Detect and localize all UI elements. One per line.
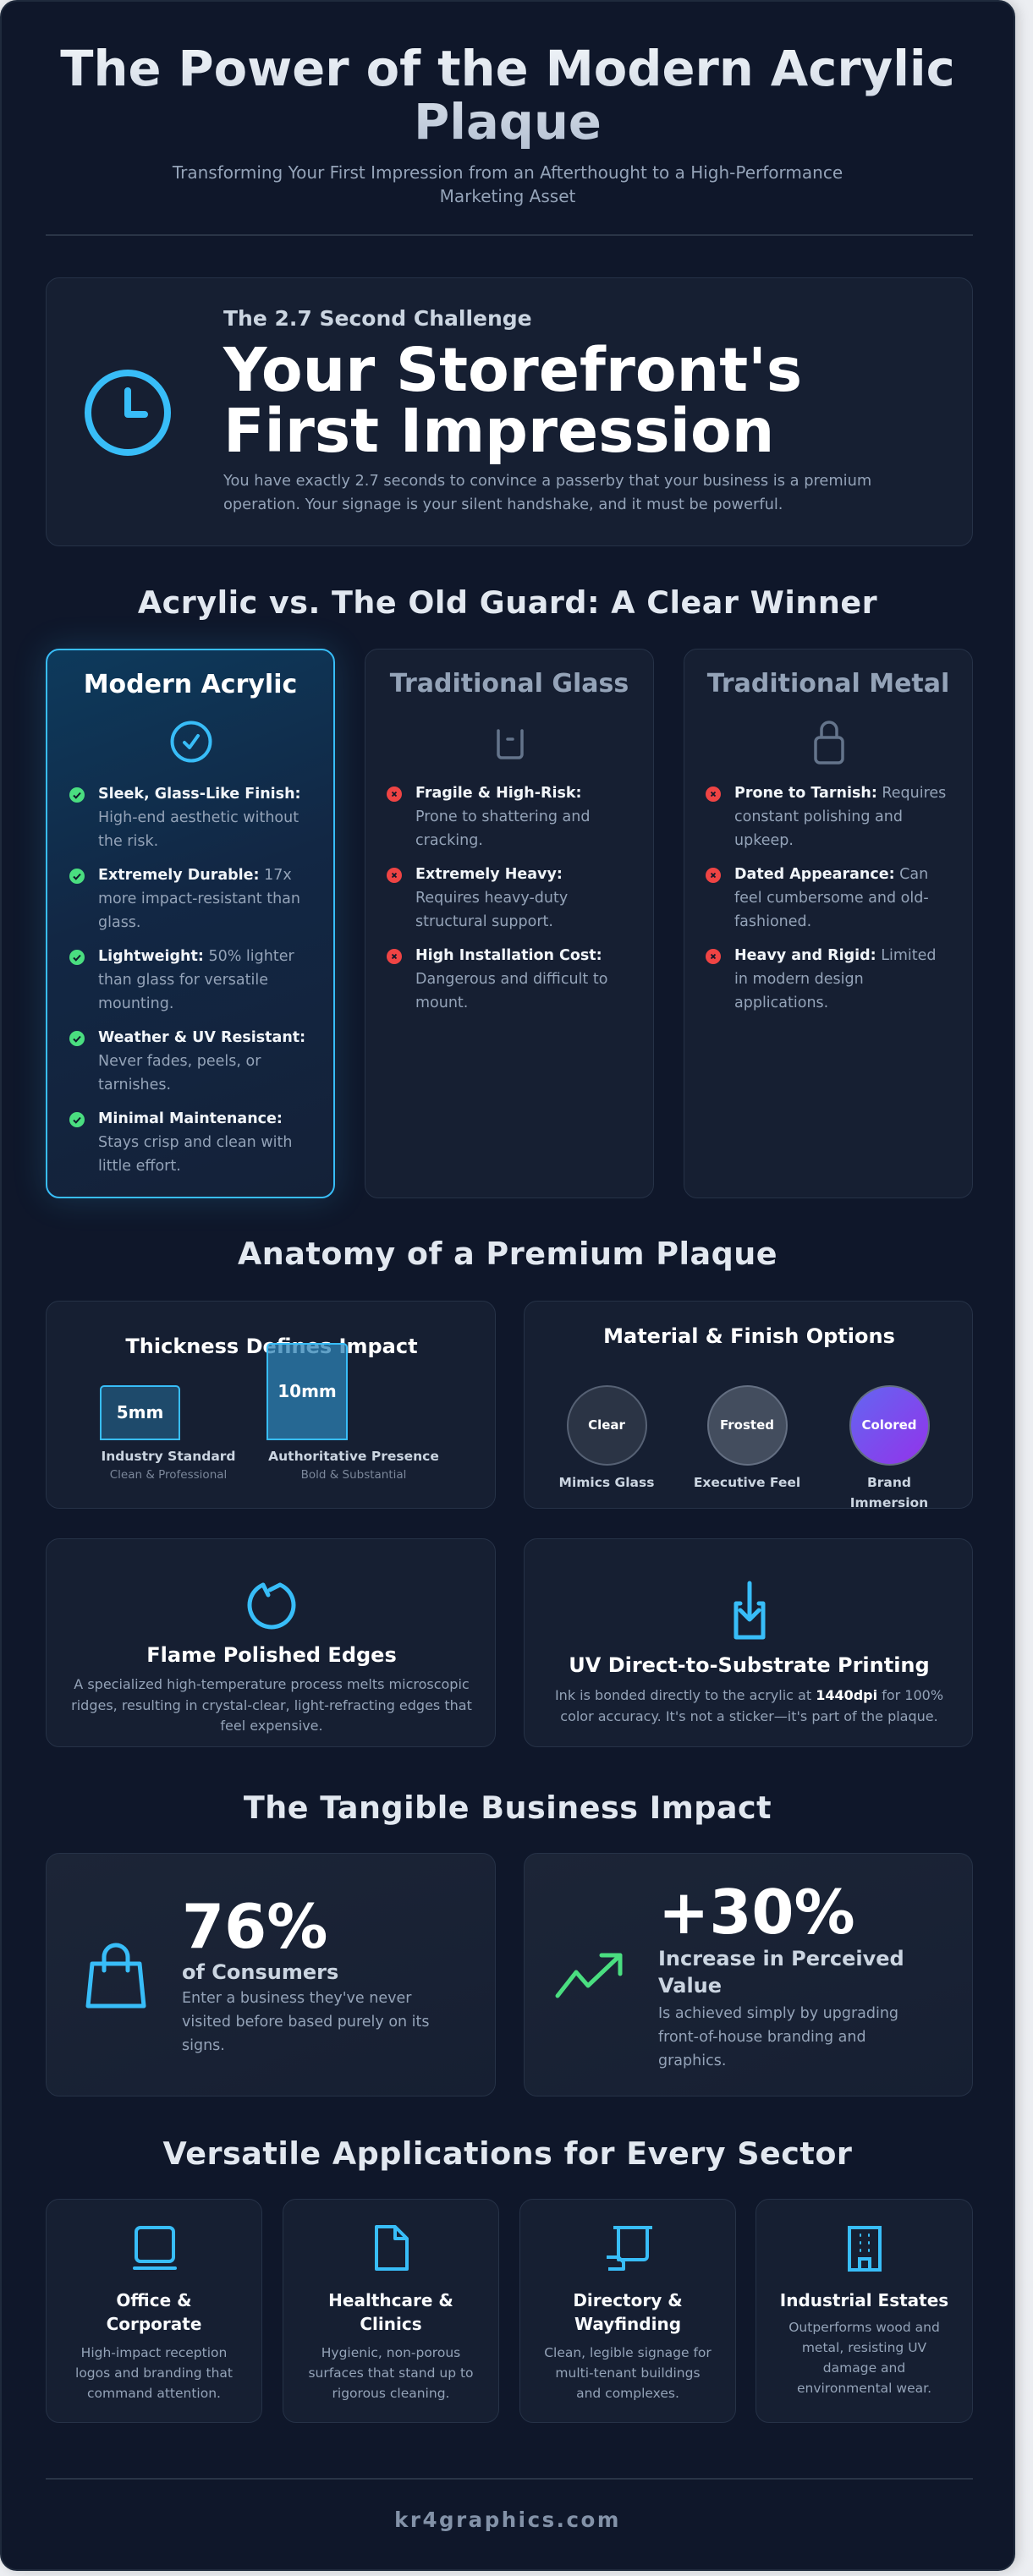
list: pros: tarnishes. [98, 1077, 171, 1093]
title: The Power of the Modern Acrylic [60, 41, 955, 97]
stat text: Increase in Perceived [658, 1947, 904, 1970]
list: metal cons: fashioned. [734, 913, 811, 930]
hero text: operation. Your signage is your silent handshake, and it must be powerful. [223, 496, 783, 513]
panel: traditional glass [365, 649, 654, 1198]
list: glass cons: Requires heavy-duty [415, 890, 568, 907]
list: metal cons: applications. [734, 995, 828, 1011]
hero text: You have exactly 2.7 seconds to convince a passerby that your business is a premium [223, 472, 871, 490]
list: pros: Never fades, peels, or [98, 1053, 261, 1070]
panel: hero first impression [46, 277, 973, 546]
list: glass cons: cracking. [415, 832, 483, 849]
list: pros [69, 786, 305, 1175]
card title: Modern Acrylic [84, 670, 297, 699]
stat text: Value [658, 1974, 722, 1998]
uv description: color accuracy. It's not a sticker—it's part of the plaque. [560, 1708, 938, 1724]
stat text: +30% [658, 1877, 855, 1948]
hero text: The 2.7 Second Challenge [223, 306, 532, 331]
directory description: and complexes. [576, 2386, 679, 2401]
healthcare title: Healthcare & [328, 2290, 453, 2310]
list: glass cons: mount. [415, 995, 468, 1011]
bar: 5mm: 5mm [117, 1402, 163, 1422]
office description: logos and branding that [75, 2365, 233, 2381]
list: pros: Sleek, Glass-Like Finish: [98, 786, 301, 803]
list: pros: than glass for versatile [98, 972, 268, 989]
icon: uv print [734, 1581, 765, 1639]
office title [107, 2290, 201, 2334]
flame description: A specialized high-temperature process melts microscopic [74, 1676, 470, 1692]
heading: comparison: Acrylic vs. The Old Guard: A Clear Winner [138, 584, 877, 621]
panel: industrial [756, 2199, 973, 2423]
list: metal cons [706, 785, 946, 1011]
flame description: ridges, resulting in crystal-clear, light-refracting edges that [71, 1696, 472, 1713]
list: metal cons: constant polishing and [734, 808, 903, 825]
uv description [555, 1687, 943, 1724]
list: metal cons: Dated Appearance: Can [734, 866, 928, 883]
title: Plaque [414, 94, 602, 151]
heading: business impact: The Tangible Business Impact [244, 1789, 772, 1826]
uv title: UV Direct-to-Substrate Printing [569, 1653, 930, 1677]
bar: 5mm [100, 1385, 180, 1440]
list: pros: Lightweight: 50% lighter [98, 948, 294, 965]
industrial description: metal, resisting UV [802, 2340, 926, 2355]
panel: healthcare [283, 2199, 499, 2423]
list: pros: Minimal Maintenance: [98, 1110, 283, 1127]
healthcare description: Hygienic, non-porous [321, 2345, 460, 2360]
healthcare description [308, 2345, 474, 2401]
list: metal cons: upkeep. [734, 832, 794, 849]
label: authoritative presence: Authoritative Presence [268, 1449, 439, 1464]
panel: stat 76% [46, 1853, 496, 2096]
stat text: Enter a business they've never [182, 1990, 411, 2007]
flame title: Flame Polished Edges [146, 1643, 397, 1667]
title [2, 42, 1014, 149]
subtitle: Transforming Your First Impression from an Afterthought to a High-Performance [173, 162, 843, 183]
directory title [573, 2290, 683, 2334]
directory title: Wayfinding [574, 2314, 681, 2334]
list: pros: the risk. [98, 833, 158, 850]
panel: material options [524, 1301, 973, 1509]
icon: lock [814, 721, 844, 765]
heading: applications: Versatile Applications for Every Sector [163, 2135, 852, 2172]
panel: thickness [46, 1301, 496, 1509]
list: pros: Extremely Durable: 17x [98, 867, 292, 884]
stat text: signs. [182, 2037, 225, 2054]
swatch: clear [559, 1385, 654, 1490]
flame description [71, 1676, 472, 1734]
material title: Material & Finish Options [603, 1324, 895, 1348]
hero text: First Impression [223, 396, 774, 466]
stat text: graphics. [658, 2053, 726, 2069]
industrial description [788, 2320, 940, 2396]
office title: Office & [116, 2290, 192, 2310]
directory description [544, 2345, 712, 2401]
swatch: clear: Clear [588, 1417, 625, 1433]
list: glass cons: structural support. [415, 913, 553, 930]
list: glass cons [387, 785, 607, 1011]
subtitle: Marketing Asset [440, 186, 575, 206]
panel: directory [519, 2199, 736, 2423]
list: pros: Stays crisp and clean with [98, 1134, 292, 1151]
healthcare title [328, 2290, 453, 2334]
industrial description: damage and [823, 2360, 905, 2376]
swatch: colored [849, 1385, 930, 1510]
list: pros: mounting. [98, 995, 173, 1012]
stat text: front-of-house branding and [658, 2029, 866, 2046]
icon: trending up [555, 1954, 623, 1998]
bar: 10mm: 10mm [277, 1381, 337, 1401]
directory title: Directory & [573, 2290, 683, 2310]
directory description: Clean, legible signage for [544, 2345, 712, 2360]
list: pros: Weather & UV Resistant: [98, 1029, 305, 1046]
icon: glass [497, 729, 524, 759]
hero text: Your Storefront's [223, 335, 802, 405]
label: authoritative presence [268, 1449, 439, 1482]
label: industry standard: Clean & Professional [110, 1468, 227, 1482]
list: metal cons: feel cumbersome and old- [734, 890, 929, 907]
bar: 10mm [266, 1343, 348, 1440]
panel: modern acrylic [46, 649, 335, 1198]
office title: Corporate [107, 2314, 201, 2334]
swatch: frosted [694, 1385, 800, 1490]
heading: anatomy: Anatomy of a Premium Plaque [238, 1236, 777, 1272]
stat text: Is achieved simply by upgrading [658, 2005, 898, 2022]
panel: flame polished edges [46, 1538, 496, 1747]
swatch: frosted: Executive Feel [694, 1475, 800, 1490]
thickness title: Thickness Defines Impact [125, 1335, 418, 1358]
list: glass cons: Dangerous and difficult to [415, 971, 607, 988]
panel: uv printing [524, 1538, 973, 1747]
list: glass cons: Prone to shattering and [415, 808, 590, 825]
icon: document [375, 2225, 409, 2271]
icon: check circle [171, 721, 212, 763]
stat text: of Consumers [182, 1960, 338, 1984]
card title: Traditional Glass [390, 669, 629, 699]
swatch: colored: Colored [861, 1417, 917, 1433]
flame description: feel expensive. [220, 1718, 323, 1734]
list: glass cons: Fragile & High-Risk: [415, 785, 582, 802]
industrial description: environmental wear. [797, 2381, 931, 2396]
stat text: visited before based purely on its [182, 2014, 430, 2031]
panel: office [46, 2199, 262, 2423]
panel: traditional metal [684, 649, 973, 1198]
healthcare description: rigorous cleaning. [332, 2386, 449, 2401]
label: industry standard [101, 1449, 236, 1482]
list: metal cons: Heavy and Rigid: Limited [734, 947, 936, 964]
icon: sign [607, 2226, 652, 2271]
list: pros: glass. [98, 914, 140, 931]
office description: High-impact reception [81, 2345, 227, 2360]
icon: clock [85, 370, 171, 456]
footer: kr4graphics.com [394, 2507, 621, 2532]
office description [75, 2345, 233, 2401]
list: metal cons: Prone to Tarnish: Requires [734, 785, 946, 802]
icon: flame polish [247, 1583, 296, 1629]
list: pros: High-end aesthetic without [98, 809, 299, 826]
list: metal cons: in modern design [734, 971, 864, 988]
hero text [223, 306, 871, 513]
card title: Traditional Metal [707, 669, 949, 699]
stat text: 76% [182, 1891, 327, 1962]
healthcare description: surfaces that stand up to [308, 2365, 474, 2381]
healthcare title: Clinics [360, 2314, 422, 2334]
label: authoritative presence: Bold & Substantial [301, 1468, 406, 1482]
icon: building [848, 2226, 882, 2272]
stat text [182, 1891, 430, 2054]
list: pros: little effort. [98, 1158, 181, 1175]
industrial title: Industrial Estates [780, 2290, 948, 2310]
directory description: multi-tenant buildings [555, 2365, 701, 2381]
industrial description: Outperforms wood and [788, 2320, 940, 2335]
icon: laptop [133, 2226, 177, 2270]
list: glass cons: Extremely Heavy: [415, 866, 563, 883]
stat text [658, 1877, 904, 2069]
swatch: colored: Brand [867, 1475, 911, 1490]
label: industry standard: Industry Standard [101, 1449, 236, 1464]
swatch: colored: Immersion [850, 1495, 928, 1510]
office description: command attention. [87, 2386, 221, 2401]
swatch: clear: Mimics Glass [559, 1475, 654, 1490]
swatch: frosted: Frosted [720, 1417, 774, 1433]
panel: stat +30% [524, 1853, 973, 2096]
list: glass cons: High Installation Cost: [415, 947, 602, 964]
list: pros: more impact-resistant than [98, 891, 300, 907]
icon: shopping bag [86, 1943, 146, 2008]
subtitle [173, 162, 843, 206]
uv description: Ink is bonded directly to the acrylic at 1440dpi for 100% [555, 1687, 943, 1703]
